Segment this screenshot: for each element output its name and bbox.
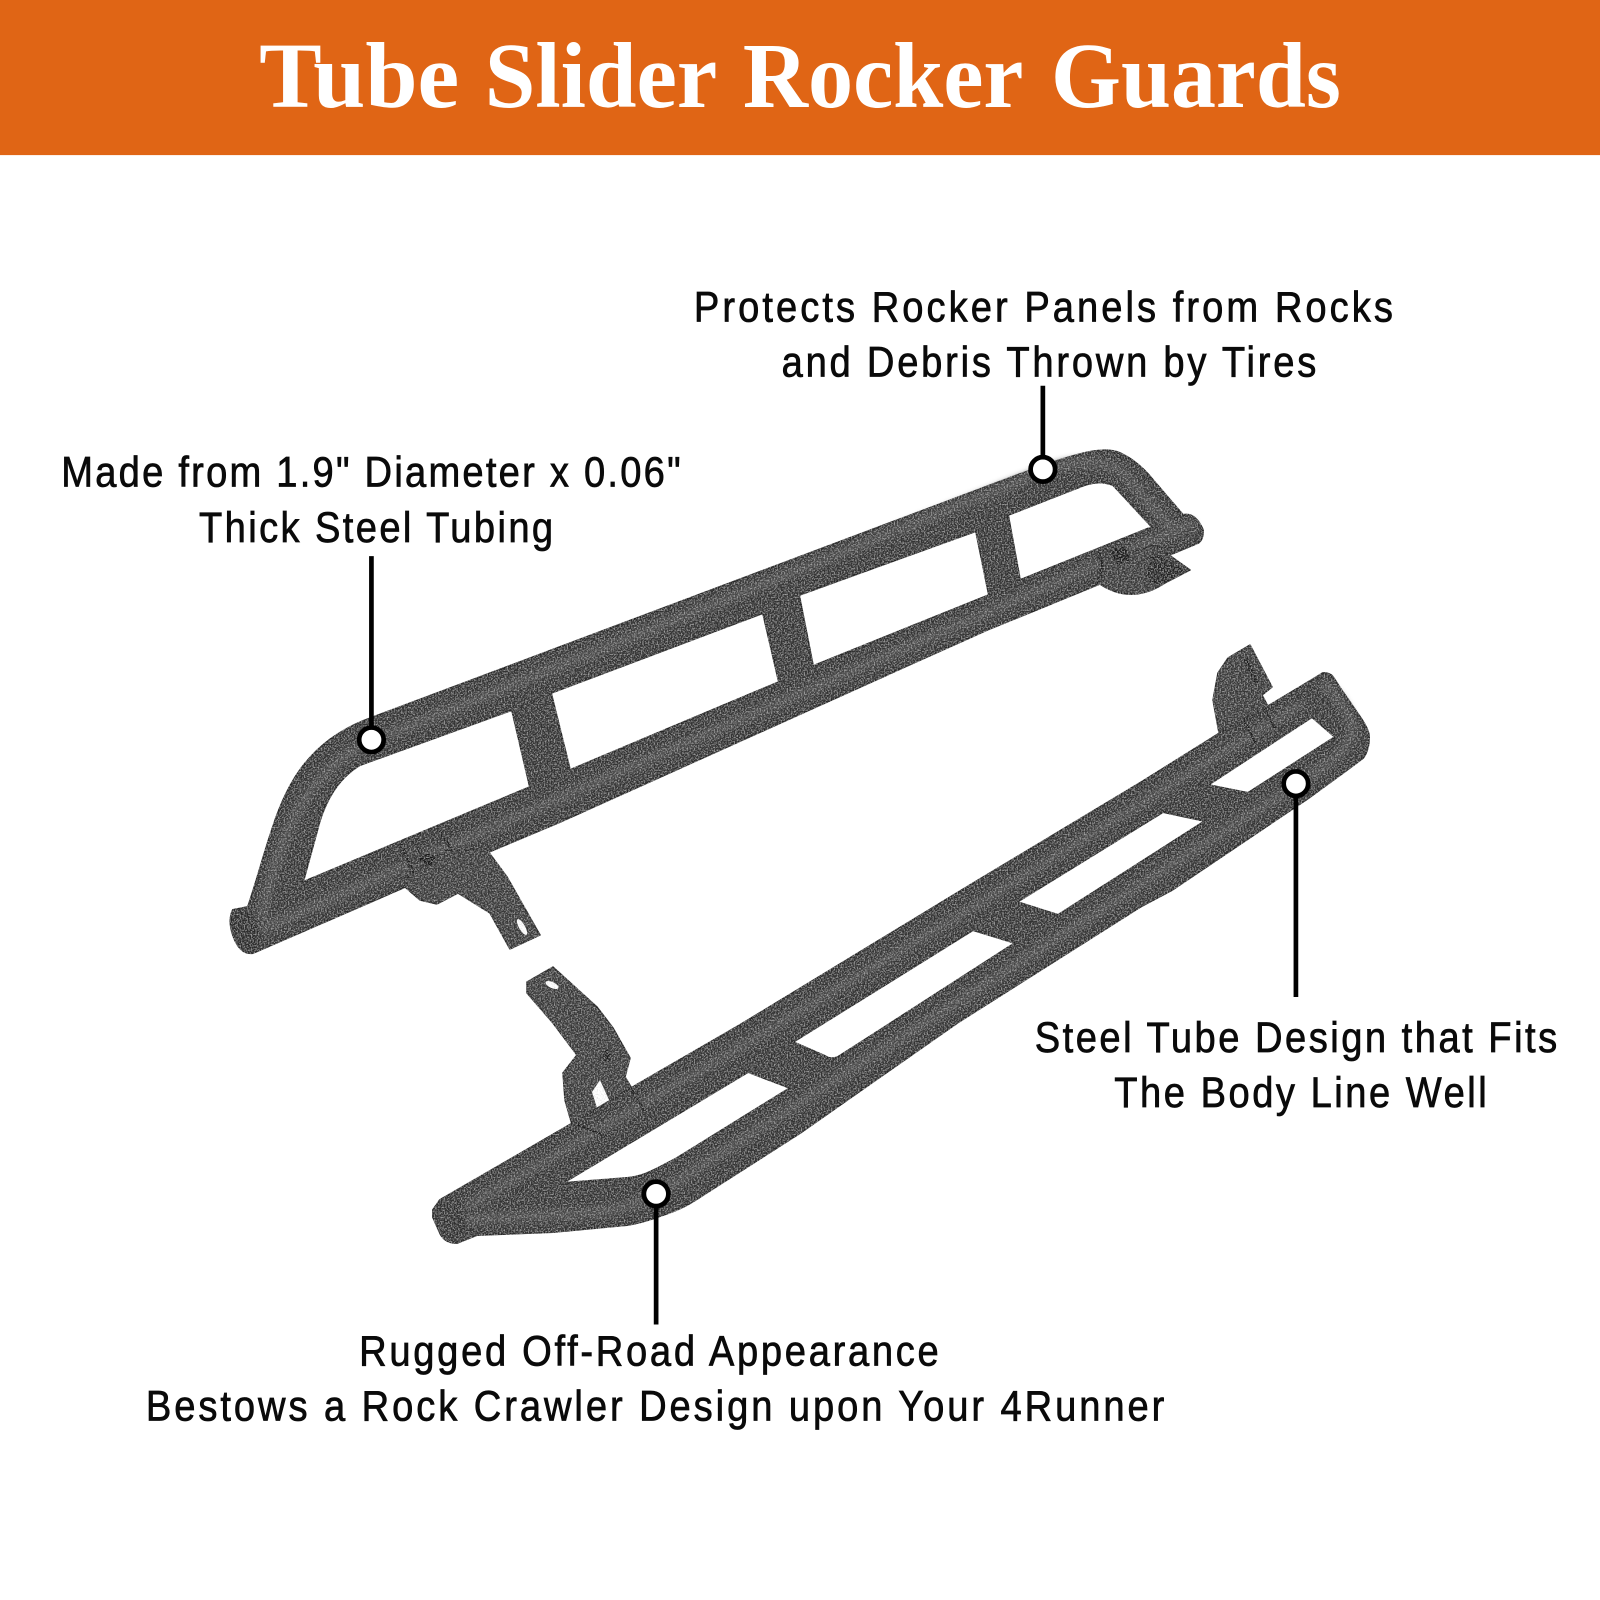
lower guard tube frame xyxy=(433,673,1369,1243)
lower guard left bracket xyxy=(527,967,645,1135)
title: Tube xyxy=(259,25,459,128)
callout: rocker panels xyxy=(694,284,1393,482)
callout: steel tubing: Thick Steel Tubing xyxy=(199,504,553,551)
callout: rocker panels: and Debris Thrown by Tires xyxy=(782,339,1316,386)
callout: off-road appearance: Rugged Off-Road Appearance xyxy=(359,1327,939,1375)
callout: off-road appearance xyxy=(146,1182,1164,1430)
upper guard right bracket xyxy=(1097,545,1190,594)
upper guard tube frame xyxy=(230,450,1203,953)
upper rocker guard xyxy=(226,450,1203,957)
lower guard end cap xyxy=(430,1196,474,1248)
title: Guards xyxy=(1051,25,1341,128)
callout: steel tubing: Made from 1.9" Diameter x 0.06" xyxy=(61,449,681,496)
callout: off-road appearance: Bestows a Rock Crawler Design upon Your 4Runner xyxy=(146,1383,1164,1430)
callout: steel tubing xyxy=(61,449,681,752)
upper guard end cap xyxy=(226,907,264,957)
title: Rocker xyxy=(743,25,1023,128)
callout: body line: Steel Tube Design that Fits xyxy=(1035,1014,1557,1062)
callout: body line: The Body Line Well xyxy=(1114,1069,1487,1117)
lower guard right bracket xyxy=(1213,645,1275,745)
lower rocker guard xyxy=(430,645,1369,1248)
callout: rocker panels: Protects Rocker Panels from Rocks xyxy=(694,284,1393,331)
upper guard left bracket xyxy=(402,832,540,949)
title: Slider xyxy=(485,25,717,128)
header banner xyxy=(0,0,1600,155)
callout: body line xyxy=(1035,771,1557,1117)
